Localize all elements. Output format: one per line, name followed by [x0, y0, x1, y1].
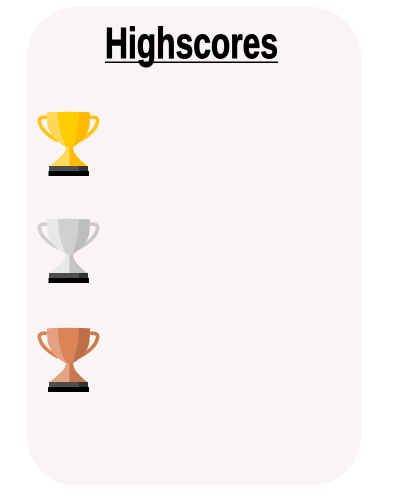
icon: silver trophy	[39, 219, 98, 283]
title: Highscores: Highscores	[105, 19, 278, 68]
icon: gold trophy	[39, 112, 98, 176]
icon: bronze trophy	[39, 328, 98, 392]
